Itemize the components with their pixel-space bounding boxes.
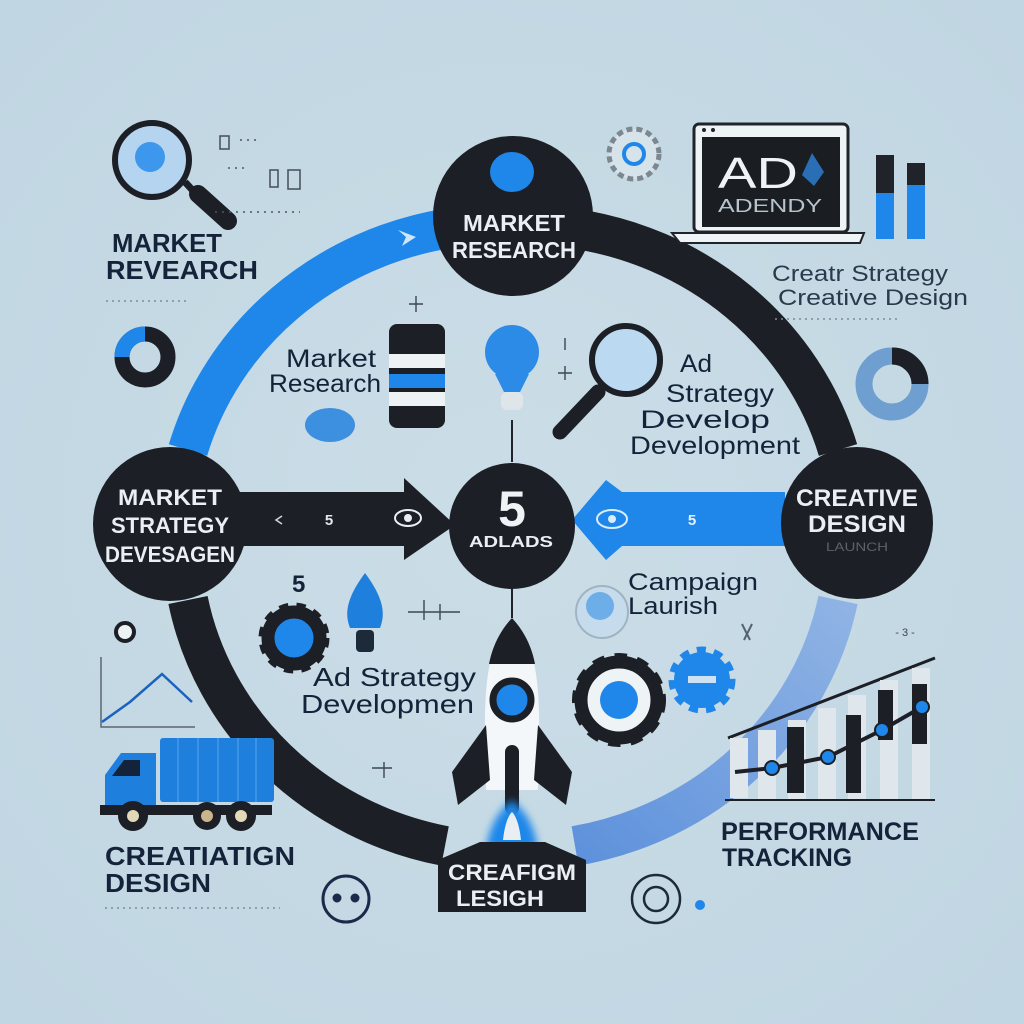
- node: top market research: [433, 136, 593, 296]
- chart: two small bars top right: [876, 155, 925, 239]
- text: creative strategy: [772, 261, 968, 310]
- arrow: ring chevron: [398, 230, 416, 246]
- node: left market strategy: [93, 447, 247, 601]
- text: ad strategy development lower: [301, 662, 476, 719]
- icon: small ring: [116, 623, 134, 641]
- node: left market strategy: DEVESAGEN: [105, 542, 235, 567]
- icon: face circle bottom: [323, 876, 369, 922]
- node label: MARKET: [118, 485, 223, 510]
- icon: large gear: [576, 657, 662, 743]
- node: top market research: RESEARCH: [452, 237, 576, 263]
- icon: large magnifier top left: [115, 123, 228, 221]
- icon: faint blue sphere: [576, 586, 628, 638]
- heading: performance tracking: [721, 818, 919, 872]
- heading: market research top left: MARKET: [112, 228, 222, 258]
- text: creative strategy: Creative Design: [778, 285, 968, 310]
- icon: blue pill: [305, 408, 355, 442]
- text: campaign launch: Campaign: [628, 569, 758, 596]
- caption: faint dots under heading: [106, 300, 190, 302]
- node label: CREATIVE: [796, 485, 918, 512]
- icon: database stack: [389, 324, 445, 428]
- icon: rocket: [452, 618, 572, 850]
- arrow: right horizontal bar: [572, 480, 785, 560]
- icon: magnifier centre right: [560, 326, 660, 432]
- icon: small cross marks: [409, 296, 572, 380]
- icon: left bar chevrons: [276, 516, 282, 524]
- icon: delivery truck: [100, 738, 274, 831]
- icon: concentric circle bottom: [632, 875, 680, 923]
- node: left market strategy: STRATEGY: [111, 513, 229, 538]
- text: market research centre left: Market: [286, 345, 376, 373]
- heading: performance tracking: PERFORMANCE: [721, 818, 919, 846]
- chart: small line left: [101, 657, 195, 727]
- icon: blue bulb: [347, 573, 383, 652]
- icon: small scattered symbols top: [215, 136, 300, 212]
- box label: CREAFIGM: [448, 860, 576, 885]
- label: left bar number: 5: [325, 512, 333, 529]
- text: market research centre left: Research: [269, 370, 381, 398]
- heading: market research top left: [106, 228, 258, 285]
- heading: market research top left: REVEARCH: [106, 255, 258, 285]
- label: small marks right: - 3 -: [895, 627, 915, 639]
- text: creative strategy: Creatr Strategy: [772, 261, 948, 286]
- center label: ADLADS: [469, 534, 553, 551]
- text: ad strategy development: Ad: [680, 350, 712, 378]
- icon: laptop with ad: ADENDY: [718, 196, 822, 216]
- line: rocket antenna: [511, 420, 513, 618]
- icon: gear left: [262, 606, 326, 670]
- icon: small chain mark: [742, 624, 752, 640]
- node: right creative design: [781, 447, 933, 599]
- text: ad strategy development lower: Developmen: [301, 689, 474, 719]
- label: small 5: 5: [292, 571, 305, 598]
- heading: creative design bottom left: DESIGN: [105, 868, 211, 898]
- icon: blue gear: [672, 650, 732, 710]
- text: ad strategy development: [630, 350, 800, 460]
- icon: small axis marks: [408, 600, 460, 620]
- chart: performance tracking: [725, 658, 935, 800]
- center number: 5: [498, 481, 526, 537]
- text: ad strategy development: Strategy: [666, 380, 775, 408]
- label: right bar number: 5: [688, 512, 696, 529]
- node: right creative design: LAUNCH: [826, 540, 888, 554]
- text: ad strategy development lower: Ad Strategy: [313, 662, 476, 692]
- text: market research centre left: [269, 345, 381, 398]
- node: bottom label box: [438, 842, 586, 912]
- icon: donut right: [864, 356, 920, 412]
- icon: eye on right bar: [597, 510, 627, 528]
- ring: cycle: [188, 228, 838, 846]
- node label: MARKET: [463, 210, 565, 236]
- icon: small marks lower centre: [372, 762, 392, 778]
- heading: performance tracking: TRACKING: [722, 844, 852, 872]
- icon: eye on left bar: [395, 510, 421, 526]
- caption: faint dots under text: [775, 318, 900, 320]
- caption: faint dots under heading: [105, 907, 280, 909]
- node: center 5 ad labels: [449, 463, 575, 589]
- text: ad strategy development: Development: [630, 432, 800, 460]
- laptop screen text: AD: [718, 149, 798, 198]
- icon: gear top centre right: [609, 129, 659, 179]
- icon: blue dot bottom: [695, 900, 705, 910]
- heading: creative design bottom left: CREATIATIGN: [105, 841, 295, 871]
- icon: laptop with ad: [672, 124, 864, 243]
- text: campaign launch: [628, 569, 758, 620]
- node: bottom label box: LESIGH: [456, 886, 544, 911]
- arrow: left horizontal bar: [240, 478, 455, 560]
- text: campaign launch: Laurish: [628, 593, 718, 620]
- icon: node blue dot: [490, 152, 534, 192]
- text: ad strategy development: Develop: [640, 406, 770, 434]
- icon: balloon bulb: [485, 325, 539, 410]
- node: right creative design: DESIGN: [808, 511, 906, 538]
- heading: creative design bottom left: [105, 841, 295, 898]
- icon: donut left: [122, 334, 168, 380]
